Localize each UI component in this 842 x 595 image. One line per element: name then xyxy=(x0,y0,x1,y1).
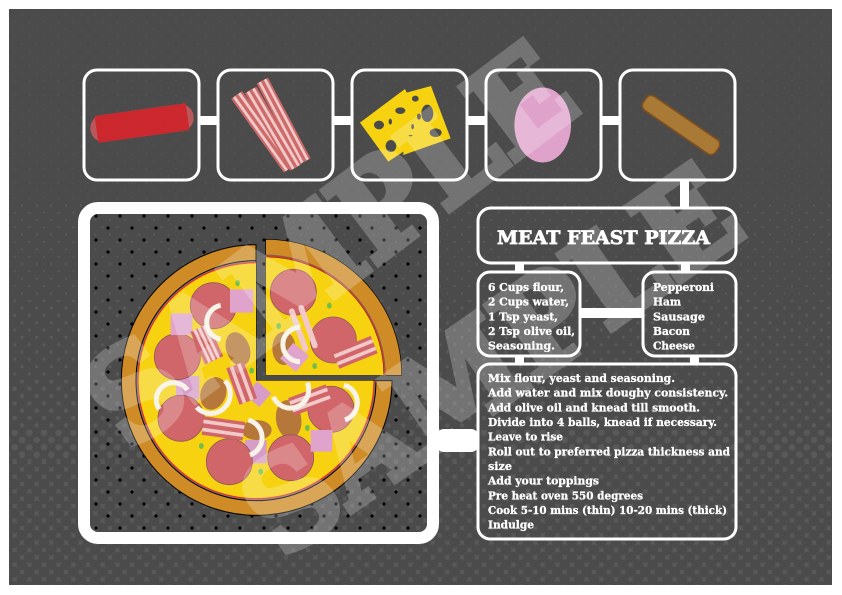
text: ingredient list: 6 Cups flour, xyxy=(488,280,564,294)
pizza body with missing quarter xyxy=(121,245,392,515)
text: ingredient list: 1 Tsp yeast, xyxy=(488,309,558,323)
watermark: second SAMPLE: SAMPLE xyxy=(215,138,766,585)
olives xyxy=(199,280,310,475)
panel: method steps xyxy=(478,364,736,539)
panel: pizza frame xyxy=(84,208,433,538)
text: toppings: Sausage xyxy=(653,309,705,323)
text: method: Cook 5-10 mins (thin) 10-20 mins (thick) xyxy=(488,503,727,517)
bacon pieces xyxy=(190,323,332,440)
icon: sausage xyxy=(640,93,722,157)
text: method: Indulge xyxy=(488,518,534,532)
panel: dough ingredients xyxy=(478,272,580,356)
text: toppings xyxy=(653,280,714,353)
text: method: Roll out to preferred pizza thickness and xyxy=(488,444,730,458)
text: ingredient list: Seasoning. xyxy=(488,339,555,353)
icon: bacon strips xyxy=(237,81,305,169)
text: method: Add water and mix doughy consistency. xyxy=(487,386,728,400)
text: ingredient list: 2 Cups water, xyxy=(488,295,569,309)
icon: pepperoni stick xyxy=(89,102,195,144)
text: method: Mix flour, yeast and seasoning. xyxy=(488,371,675,385)
text: method: Divide into 4 balls, knead if necessary. xyxy=(488,415,717,429)
onion rings xyxy=(156,305,357,455)
panel: ham ingredient xyxy=(486,70,601,180)
text: toppings: Cheese xyxy=(653,339,695,353)
text: toppings: Ham xyxy=(653,295,681,309)
text: ingredient list: 2 Tsp olive oil, xyxy=(488,324,575,338)
text: ingredient list xyxy=(488,280,575,353)
watermark: first SAMPLE: SAMPLE xyxy=(58,16,601,476)
text: method: Add olive oil and knead till smooth. xyxy=(487,400,700,414)
heading: MEAT FEAST PIZZA xyxy=(497,228,711,249)
connectors xyxy=(198,116,699,452)
pizza slice xyxy=(266,239,402,375)
text: method: Add your toppings xyxy=(487,474,599,488)
icon: ham slice xyxy=(514,88,571,162)
panel: sausage ingredient xyxy=(620,70,735,180)
text: method xyxy=(487,371,730,532)
text: toppings: Bacon xyxy=(653,324,690,338)
panel: pepperoni ingredient xyxy=(84,70,199,180)
icon: cheese slices xyxy=(360,86,451,162)
panel: bacon ingredient xyxy=(218,70,333,180)
text: toppings: Pepperoni xyxy=(653,280,714,294)
panel: toppings list xyxy=(643,272,736,356)
text: method: size xyxy=(488,459,512,473)
pizza illustration xyxy=(121,239,402,515)
panel: title xyxy=(478,208,736,263)
text: method: Leave to rise xyxy=(488,430,563,444)
toppings on main pizza xyxy=(154,280,357,485)
text: method: Pre heat oven 550 degrees xyxy=(488,488,643,502)
panel: cheese ingredient xyxy=(352,70,467,180)
